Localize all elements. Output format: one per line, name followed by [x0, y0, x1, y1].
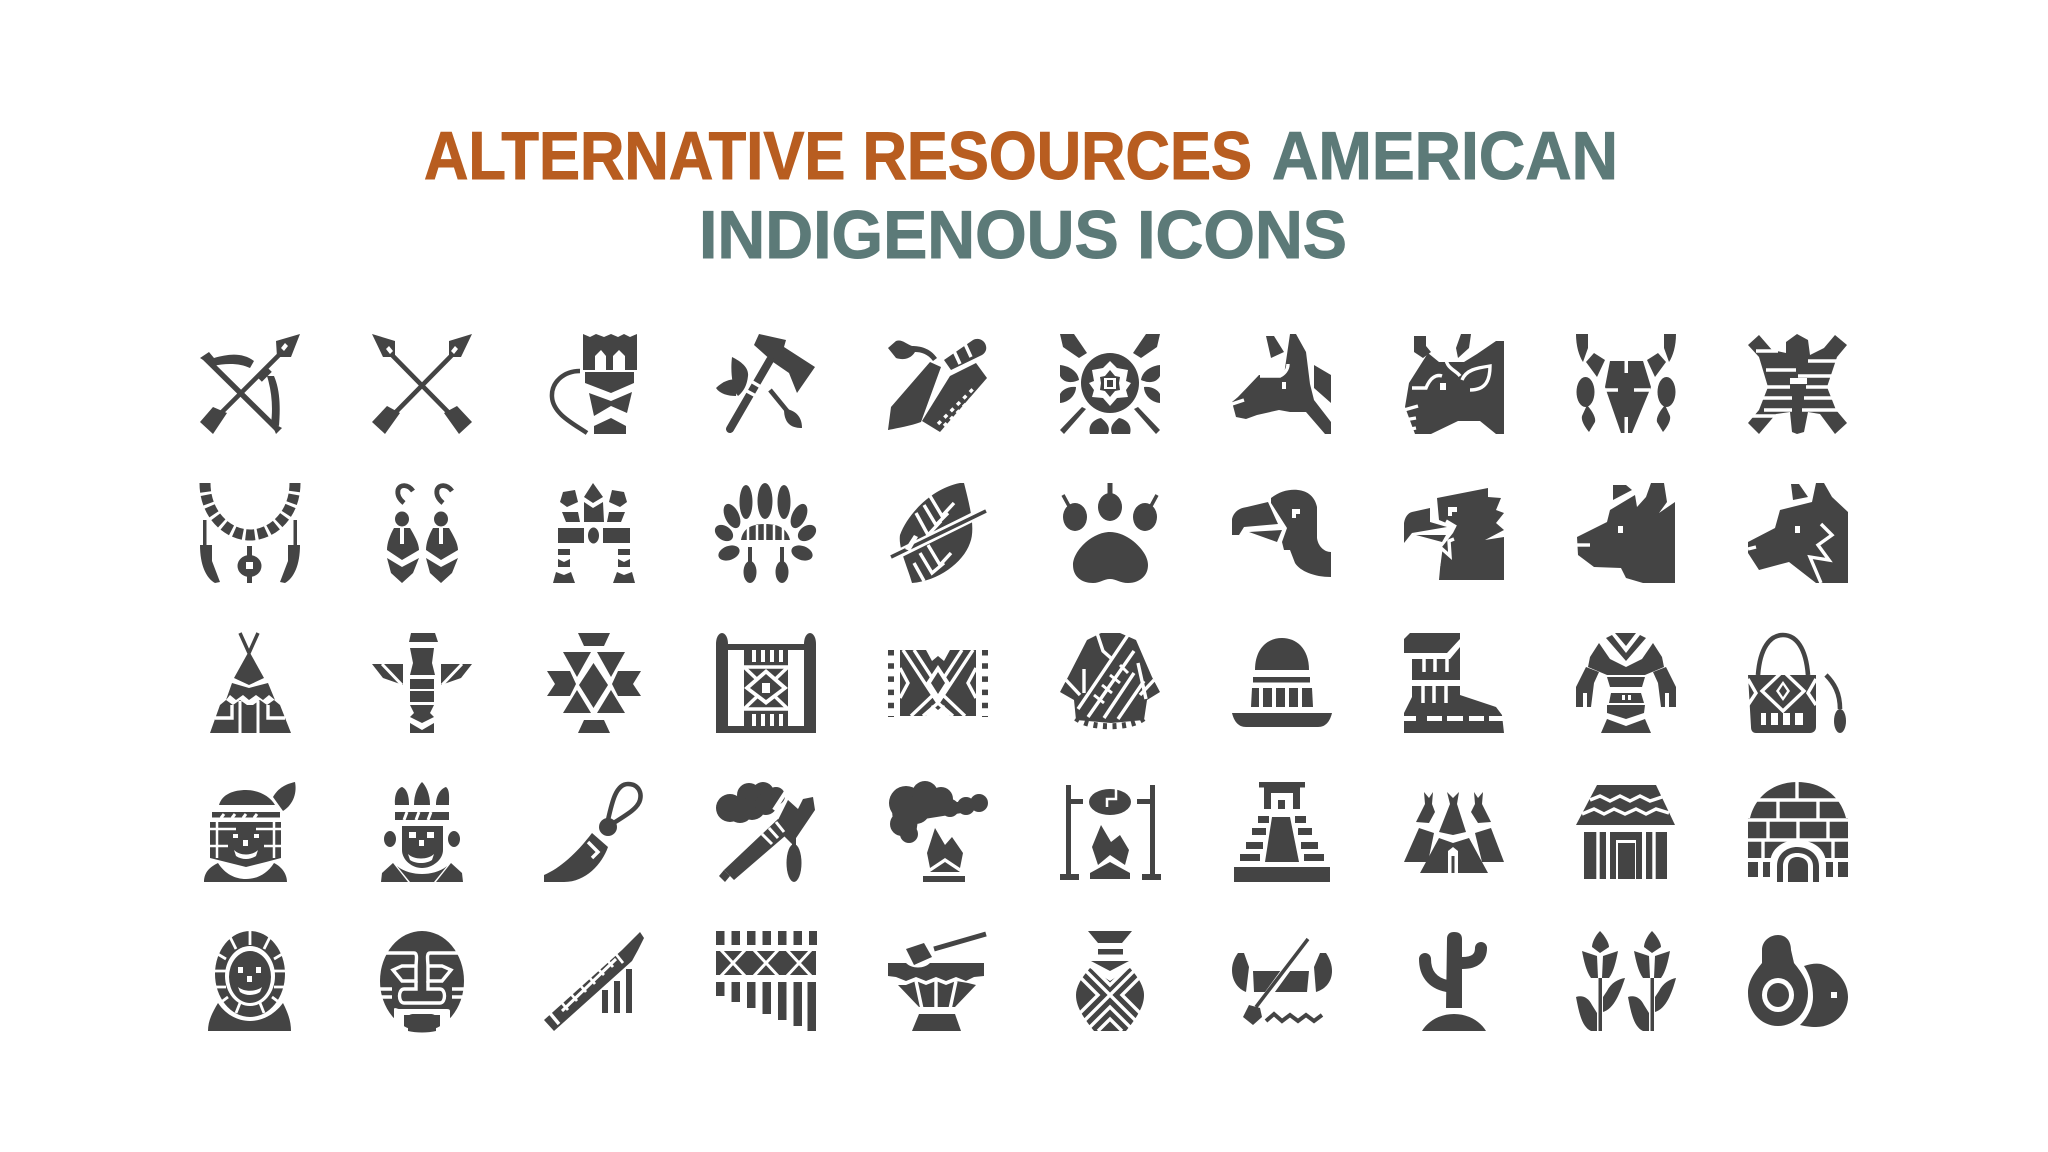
icon: paw print	[1063, 483, 1157, 583]
icon: stepped pyramid	[1234, 782, 1330, 882]
icon: bear head	[1577, 483, 1675, 583]
icon: tomahawk	[716, 334, 815, 429]
icon: patterned vase	[1074, 931, 1146, 1031]
icon: sombrero hat	[1232, 638, 1332, 727]
icon: animal hide	[1748, 334, 1847, 434]
icon: tribal mask	[380, 931, 464, 1032]
icon grid	[200, 334, 1848, 1032]
title: AMERICAN	[1272, 118, 1618, 194]
icon: pan pipes	[716, 938, 817, 1031]
icon: shield and spears	[1060, 334, 1160, 434]
icon: feather earrings	[387, 486, 458, 583]
icon: drum	[888, 934, 986, 1031]
icon: chief with feather	[204, 782, 296, 882]
icon: tribal man	[381, 782, 463, 882]
icon: rhino head	[1404, 334, 1504, 434]
icon: teepee	[210, 633, 291, 733]
icon: thatched hut	[1576, 785, 1675, 879]
icon: patterned carpet	[891, 650, 985, 717]
icon: kilim pattern	[547, 633, 641, 733]
title	[424, 118, 1618, 273]
icon: smoke and fire	[889, 781, 988, 882]
icon: feather headband	[553, 483, 635, 583]
icon: cactus	[1422, 932, 1486, 1031]
icon: poncho robe	[1060, 633, 1160, 726]
icon: wolf head	[1748, 483, 1848, 583]
icon: decorated leaf	[890, 483, 987, 583]
icon: horse head	[1232, 334, 1331, 434]
icon: woven rug	[716, 633, 816, 733]
icon: war bonnet	[712, 483, 819, 583]
icon: totem pole	[372, 633, 472, 733]
icon: boot	[1404, 633, 1504, 733]
icon: quiver and bow	[552, 334, 637, 434]
icon: knife and sheath	[888, 339, 987, 432]
icon: vulture	[1232, 490, 1331, 577]
icon: skull and feathers	[1576, 334, 1676, 434]
title: ALTERNATIVE RESOURCES	[424, 118, 1252, 194]
icon: igloo	[1748, 782, 1848, 882]
icon: handbag	[1748, 635, 1846, 733]
icon: corn plants	[1576, 931, 1676, 1031]
icon: crossed arrows	[372, 334, 472, 434]
icon: tunic	[1576, 633, 1676, 733]
icon: flute	[544, 932, 644, 1031]
icon: spit roast	[1060, 785, 1161, 880]
icon: three teepees	[1404, 792, 1504, 873]
icon: avocado	[1748, 935, 1848, 1027]
title: INDIGENOUS ICONS	[699, 197, 1347, 273]
icon: hooded person	[208, 931, 291, 1031]
icon: bead necklace	[200, 483, 300, 583]
icon: peace pipe and smoke	[716, 782, 815, 882]
icon: canoe and paddle	[1232, 937, 1332, 1025]
icon: curved knife with loop	[544, 784, 640, 882]
icon: eagle	[1404, 488, 1504, 580]
icon: bow and arrow	[200, 334, 300, 434]
